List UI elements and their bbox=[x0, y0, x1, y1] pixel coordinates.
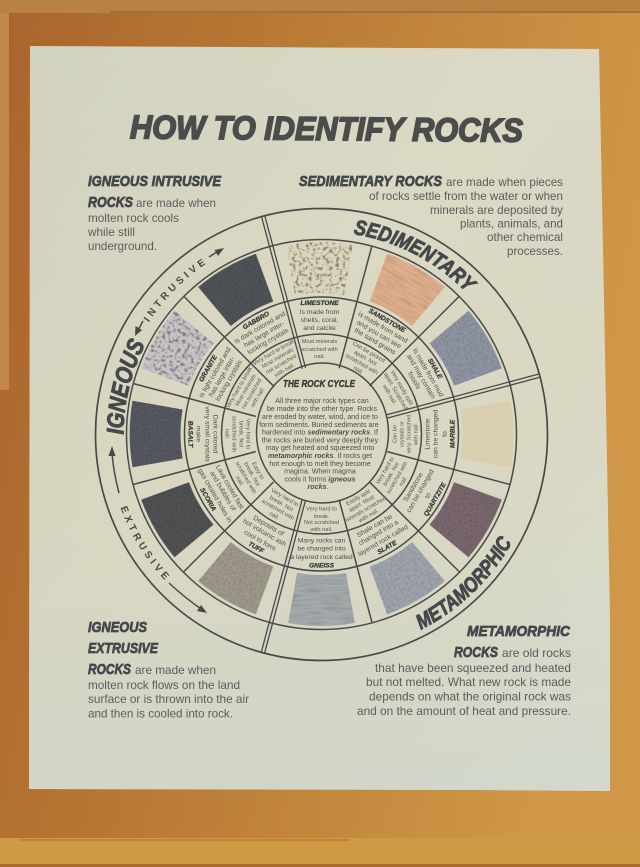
wedge text: basalt: very small crystals bbox=[204, 406, 210, 462]
wedge text: granite bbox=[191, 342, 275, 424]
wedge text: gabbro: has large inter- bbox=[243, 320, 286, 349]
wedge text: gabbro: Most minerals bbox=[261, 347, 295, 370]
text block: sedimentary rocks: minerals are deposited by bbox=[430, 203, 563, 217]
text block: igneous intrusive rocks: while still bbox=[87, 225, 135, 239]
wedge text: granite: locking crystals bbox=[215, 359, 244, 402]
center: the rock cycle: form sediments. Buried sediments are bbox=[259, 421, 379, 429]
wedge text: quartzite: can be changed bbox=[406, 468, 436, 514]
wedge text: limestone: Most minerals bbox=[302, 339, 337, 345]
wedge text: gabbro bbox=[230, 303, 312, 388]
wedge text: tuff: TUFF bbox=[247, 541, 266, 556]
wedge text: tuff: Deposits of bbox=[252, 515, 285, 538]
wedge text: gneiss: Many rocks can bbox=[298, 538, 346, 544]
wedge text: shale bbox=[373, 343, 451, 420]
wedge text: tuff: hot volcanic ash bbox=[241, 518, 287, 548]
title: HOW TO IDENTIFY ROCKS bbox=[130, 108, 523, 149]
center: the rock cycle: the rocks are buried very deeply they bbox=[262, 436, 379, 444]
wedge text: scoria: break. Not bbox=[242, 462, 261, 488]
wedge text: slate: Easily split bbox=[345, 489, 372, 507]
wedge text: quartzite: QUARTZITE bbox=[423, 481, 448, 518]
center: the rock cycle: be made into the other type. Rocks bbox=[267, 405, 377, 413]
arrow: extrusive down bbox=[169, 583, 207, 613]
wedge text: sandstone bbox=[332, 304, 413, 387]
center: the rock cycle: rocks. bbox=[308, 483, 328, 491]
wedge text: gabbro: GABBRO bbox=[242, 310, 271, 331]
wedge text: quartzite: break. Not bbox=[382, 461, 401, 487]
photo: gneiss bbox=[288, 573, 355, 626]
wedge text: limestone: LIMESTONE bbox=[300, 300, 339, 307]
wedge text: gneiss: with nail. bbox=[309, 527, 333, 533]
ring label: sedimentary: SEDIMENTARY bbox=[354, 220, 479, 290]
wedge text: slate: changed into a bbox=[358, 519, 400, 547]
wedge text: gabbro: locking crystals bbox=[247, 327, 290, 356]
text block: igneous intrusive rocks bbox=[87, 173, 222, 253]
text block: igneous intrusive rocks: IGNEOUS INTRUSIVE bbox=[88, 173, 222, 190]
wedge text: limestone: and calcite bbox=[303, 325, 336, 332]
text block: igneous extrusive rocks: molten rock flows on the land bbox=[88, 678, 240, 692]
wedge text: tuff: cool to form bbox=[243, 529, 277, 553]
photo: basalt bbox=[130, 401, 183, 467]
wedge text: gabbro: is dark colored and bbox=[234, 310, 287, 345]
center: the rock cycle: hot enough to melt they become bbox=[269, 460, 371, 468]
wedge text: scoria: scratched with bbox=[234, 461, 257, 495]
wedge text: quartzite: to bbox=[424, 491, 433, 500]
wheel rings bbox=[96, 208, 548, 660]
wedge text: basalt bbox=[186, 406, 250, 462]
text block: igneous intrusive rocks: molten rock cools bbox=[88, 211, 179, 225]
wedge text: scoria bbox=[189, 443, 275, 528]
center: the rock cycle: THE ROCK CYCLE bbox=[283, 379, 355, 390]
wedge text: marble: with nail. bbox=[414, 423, 420, 446]
wedge text: basalt: break. Not bbox=[238, 421, 244, 448]
center: the rock cycle: may get heated and squeezed into bbox=[266, 444, 374, 452]
wedge text: shale: Is made from mud bbox=[411, 347, 444, 398]
wedge text: sandstone: nail. bbox=[352, 366, 364, 376]
center: the rock cycle: magma. When magma bbox=[284, 468, 356, 476]
wedge text: gabbro: Very hard to break. bbox=[252, 338, 297, 367]
wedge text: shale: SHALE bbox=[426, 357, 443, 381]
wedge text: tuff bbox=[233, 483, 307, 563]
wedge text: basalt: Dark colored bbox=[212, 415, 218, 453]
wedge text: basalt: BASALT bbox=[186, 421, 194, 448]
wedge text: granite: Very hard to break. bbox=[225, 364, 255, 409]
wedge text: shale: fossils bbox=[406, 371, 422, 391]
text block: igneous extrusive rocks: IGNEOUS bbox=[88, 619, 147, 636]
wedge text: scoria: and bubbles of bbox=[208, 470, 237, 512]
wedge text: limestone: Is made from bbox=[300, 309, 340, 316]
wedge text: sandstone: Can be picked bbox=[351, 341, 386, 364]
wedge text: gneiss bbox=[290, 506, 353, 570]
photo: tuff bbox=[197, 538, 281, 617]
text block: igneous intrusive rocks: ROCKS bbox=[88, 194, 133, 211]
wedge text: gneiss: GNEISS bbox=[309, 562, 335, 570]
wedge text: granite: has large inter- bbox=[208, 355, 237, 398]
photo: sandstone bbox=[362, 251, 446, 330]
photo: limestone bbox=[286, 242, 353, 295]
wedge text: slate: layered rock called bbox=[357, 524, 410, 558]
wedge text: tuff: scratched with bbox=[260, 499, 295, 522]
text block: sedimentary rocks: are made when pieces bbox=[446, 175, 563, 189]
ring label: metamorphic: METAMORPHIC bbox=[416, 536, 510, 630]
wedge text: basalt: nail. bbox=[224, 429, 230, 440]
text block: igneous intrusive rocks: underground. bbox=[88, 239, 157, 253]
wedge text: granite: is light colored and bbox=[198, 346, 233, 399]
text block: metamorphic rocks: that have been squeezed and heated bbox=[375, 661, 571, 675]
center: the rock cycle: hardened into sedimentary rocks. If bbox=[262, 428, 378, 436]
wedge text: marble: crystals or bbox=[400, 421, 406, 447]
wedge text: marble: Limestone bbox=[424, 418, 432, 450]
text block: sedimentary rocks: of rocks settle from the water or when bbox=[369, 189, 563, 203]
rock wheel bbox=[94, 208, 548, 662]
wedge text: marble: to bbox=[442, 431, 448, 437]
wedge text: granite: GRANITE bbox=[198, 354, 219, 383]
wedge text: basalt: scratched with bbox=[230, 416, 236, 452]
text block: sedimentary rocks: processes. bbox=[507, 244, 563, 258]
wedge text: slate: apart. Most bbox=[348, 494, 376, 514]
wedge text: basalt: make bbox=[194, 426, 202, 443]
center: the rock cycle bbox=[259, 379, 379, 491]
photo: granite bbox=[139, 309, 218, 393]
wedge text: slate bbox=[332, 481, 414, 565]
center: the rock cycle: are eroded by water, wind, and ice to bbox=[262, 413, 378, 421]
wedge text: shale: and may contain bbox=[405, 353, 436, 400]
wedge text: shale: with nail. bbox=[380, 383, 397, 406]
text block: igneous extrusive rocks bbox=[88, 619, 249, 720]
wedge text: scoria: Easy to bbox=[250, 461, 265, 481]
wedge text: sandstone: is made from sand bbox=[357, 311, 409, 345]
wedge text: quartzite: Very hard to bbox=[375, 456, 396, 486]
photo: slate bbox=[362, 538, 446, 617]
wedge text: gabbro: not scratched bbox=[265, 354, 298, 376]
wedge text: shale: apart. Scratched bbox=[382, 372, 408, 411]
wedge text: quartzite: nail. bbox=[399, 475, 409, 488]
text block: metamorphic rocks: ROCKS bbox=[454, 644, 498, 661]
wedge text: sandstone: the sand grains bbox=[353, 327, 397, 357]
wedge text: gneiss: Not scratched bbox=[304, 520, 339, 526]
text block: sedimentary rocks bbox=[299, 173, 563, 258]
text block: igneous extrusive rocks: are made when bbox=[135, 663, 216, 677]
wedge text: gabbro: with nail. bbox=[273, 362, 296, 379]
text block: igneous extrusive rocks: ROCKS bbox=[88, 661, 131, 678]
wedge text: limestone: nail. bbox=[314, 354, 325, 360]
wedge text: shale: Very easily split bbox=[389, 370, 414, 407]
wedge text: scoria: Lava cooled fast bbox=[214, 464, 245, 511]
wedge text: tuff: nail. bbox=[268, 511, 280, 522]
wedge text: gneiss: be changed into bbox=[297, 546, 346, 552]
wedge text: sandstone: scratched with bbox=[344, 353, 379, 376]
text block: metamorphic rocks: depends on what the original rock was bbox=[369, 690, 571, 704]
wedge text: quartzite: Sandstone bbox=[403, 471, 425, 503]
arrow: extrusive up bbox=[108, 446, 119, 493]
ring label: extrusive: EXTRUSIVE bbox=[120, 506, 170, 580]
text block: igneous intrusive rocks: are made when bbox=[136, 196, 216, 210]
wedge text: granite: not scratched bbox=[241, 378, 263, 410]
text block: igneous extrusive rocks: and then is cooled into rock. bbox=[88, 706, 233, 720]
text block: igneous extrusive rocks: surface or is thrown into the air bbox=[88, 692, 249, 706]
wedge text: limestone: scratched with bbox=[301, 347, 338, 353]
arrow: intrusive left bbox=[135, 321, 143, 336]
photo: scoria bbox=[139, 475, 218, 559]
wedge text: slate: SLATE bbox=[376, 539, 399, 556]
text block: metamorphic rocks: are old rocks bbox=[502, 646, 571, 660]
wedge text: slate: with nail. bbox=[357, 508, 380, 525]
text block: metamorphic rocks: METAMORPHIC bbox=[467, 623, 571, 640]
photo: quartzite bbox=[425, 475, 504, 559]
wedge text: limestone: shells, coral, bbox=[301, 317, 338, 324]
wedge text: quartzite bbox=[371, 448, 451, 522]
wedge text: marble: can be changed bbox=[432, 410, 440, 458]
center: the rock cycle: All three major rock types can bbox=[275, 397, 369, 405]
text block: metamorphic rocks: and on the amount of heat and pressure. bbox=[357, 704, 571, 718]
text block: metamorphic rocks: but not melted. What new rock is made bbox=[366, 675, 571, 689]
wedge text: granite: with nail. bbox=[250, 386, 267, 409]
wedge text: granite: Most minerals bbox=[235, 374, 258, 407]
wedge dividers bbox=[133, 215, 540, 653]
wedge text: sandstone: SANDSTONE bbox=[367, 308, 407, 335]
wedge text: quartzite: scratched with bbox=[386, 461, 409, 495]
wedge text: limestone bbox=[300, 300, 340, 360]
wedge text: tuff: break. Not bbox=[268, 495, 294, 514]
wedge text: marble bbox=[392, 410, 456, 458]
center: the rock cycle: cools it forms igneous bbox=[285, 476, 356, 484]
text block: metamorphic rocks bbox=[357, 623, 571, 718]
wedge text: basalt: Very hard to bbox=[244, 419, 250, 449]
wedge text: marble: Can be bbox=[392, 425, 398, 443]
wedge text: marble: very. Scratched bbox=[406, 414, 412, 454]
photo: marble bbox=[460, 401, 513, 467]
ring label: igneous: IGNEOUS bbox=[106, 338, 144, 435]
wedge text: slate: Shale can be bbox=[356, 513, 394, 539]
ring label: intrusive: INTRUSIVE bbox=[144, 258, 206, 322]
wedge text: gneiss: Very hard to bbox=[306, 506, 337, 512]
text block: sedimentary rocks: other chemical bbox=[487, 230, 563, 244]
photo: shale bbox=[425, 309, 504, 393]
wedge text: tuff: Very hard to bbox=[270, 488, 299, 508]
arrow: intrusive right bbox=[209, 248, 224, 257]
wedge text: scoria: gas created holes in bbox=[196, 468, 233, 524]
wedge text: gneiss: a layered rock called bbox=[290, 554, 353, 561]
wedge text: scoria: SCORIA bbox=[198, 487, 217, 513]
text block: igneous extrusive rocks: EXTRUSIVE bbox=[88, 640, 159, 657]
photo: gabbro bbox=[197, 251, 281, 330]
wedge text: marble: MARBLE bbox=[450, 419, 456, 448]
wedge text: scoria: nail. bbox=[234, 475, 245, 488]
paper sheet bbox=[29, 46, 610, 791]
text block: sedimentary rocks: SEDIMENTARY ROCKS bbox=[299, 173, 442, 190]
center: the rock cycle: metamorphic rocks. If rocks get bbox=[268, 452, 372, 460]
wedge text: sandstone: apart. Not bbox=[353, 350, 378, 368]
wedge text: sandstone: and you can see bbox=[355, 319, 402, 350]
wedge text: gneiss: break. bbox=[314, 514, 330, 520]
text block: sedimentary rocks: plants, animals, and bbox=[460, 216, 563, 230]
wedge text: slate: minerals scratched bbox=[343, 496, 388, 525]
